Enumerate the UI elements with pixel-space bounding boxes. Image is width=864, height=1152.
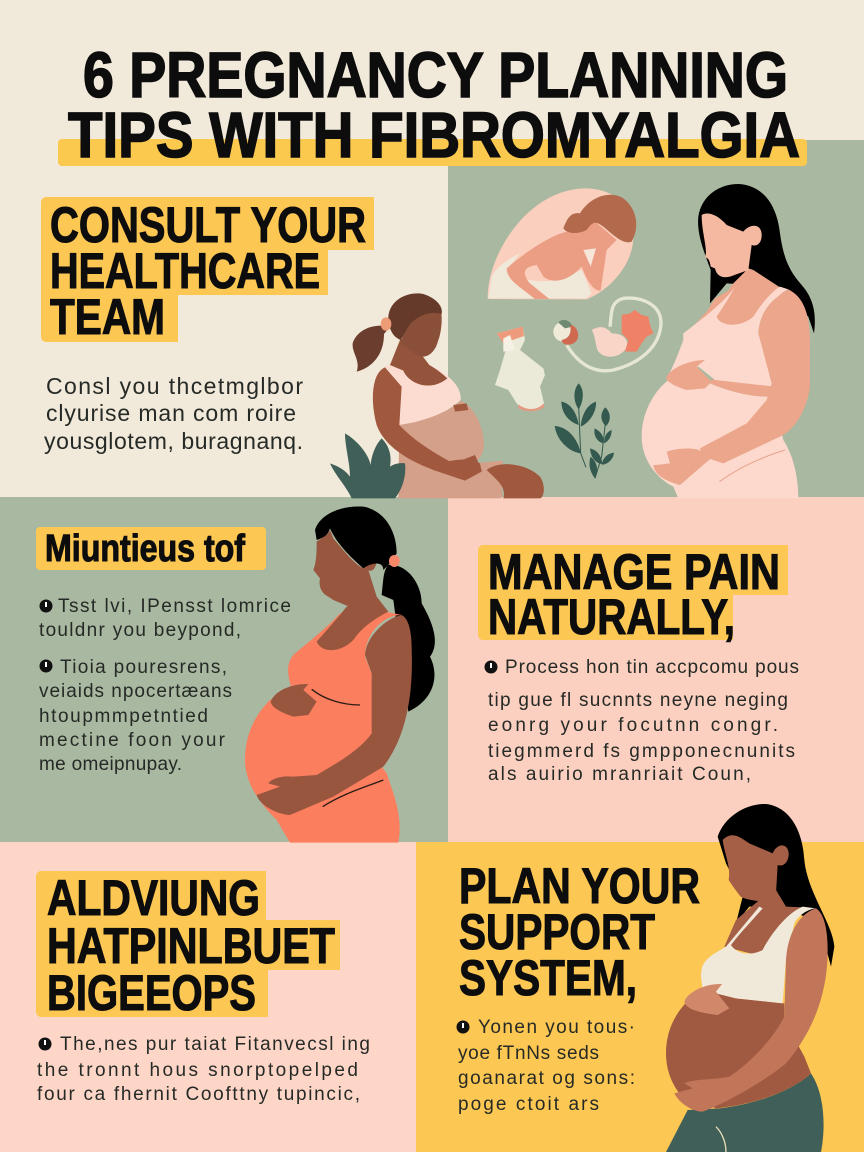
text block: manage pain body: tip gue fl sucnnts neyne neging — [488, 690, 788, 711]
text block: manage pain body: Process hon tin accpcomu pous — [505, 657, 799, 678]
text block: miuntieus bullets: mectine foon your — [39, 730, 226, 751]
panel: green top right background — [448, 140, 864, 497]
text block: consult body — [44, 373, 303, 454]
text block: plan support body — [456, 1017, 635, 1115]
heading: aldviung hatpinlbuet bigeeops — [36, 870, 340, 1021]
icon: medicine bottle — [495, 327, 545, 411]
illustration: woman bending in pain bubble — [488, 188, 636, 299]
heading: miuntieus tof: Miuntieus tof — [45, 528, 245, 570]
heading: consult your healthcare team: CONSULT YOUR — [50, 197, 366, 253]
text block: plan support body: Yonen you tous· — [478, 1017, 635, 1038]
text block: consult body: Consl you thcetmglbor — [46, 373, 303, 399]
panel: pink bottom left background — [0, 842, 416, 1152]
illustration: pregnant woman with pink tank top — [642, 184, 815, 498]
text block: plan support body: goanarat og sons: — [458, 1068, 635, 1089]
text block: manage pain body: tiegmmerd fs gmpponecnunits — [488, 741, 795, 762]
heading: plan your support system: SYSTEM, — [459, 950, 637, 1006]
heading: aldviung hatpinlbuet bigeeops: HATPINLBUET — [47, 918, 335, 974]
text block: miuntieus bullets: htoupmmpetntied — [39, 706, 208, 727]
heading: manage pain naturally: MANAGE PAIN — [488, 544, 780, 600]
text block: aldviung body: The,nes pur taiat Fitanvecsl ing — [60, 1034, 370, 1055]
heading: consult your healthcare team: TEAM — [50, 289, 165, 345]
text block: miuntieus bullets: Tioia pouresrens, — [60, 657, 227, 678]
illustration: seated woman with plant — [330, 293, 544, 498]
text block: manage pain body — [484, 657, 799, 785]
text block: manage pain body: als auirio mranriait Coun, — [488, 764, 751, 785]
heading: plan your support system — [459, 858, 700, 1006]
panel: pink middle right background — [448, 497, 864, 842]
text block: plan support body: yoe fTnNs seds — [458, 1043, 599, 1064]
heading: aldviung hatpinlbuet bigeeops: BIGEEOPS — [47, 965, 256, 1021]
text block: miuntieus bullets — [39, 596, 291, 775]
heading: consult your healthcare team: HEALTHCARE — [50, 243, 320, 299]
text block: plan support body: poge ctoit ars — [458, 1094, 599, 1115]
text block: aldviung body — [37, 1034, 370, 1105]
panel: yellow bottom right background — [416, 842, 864, 1152]
text block: miuntieus bullets: me omeipnupay. — [39, 754, 182, 775]
panel: green middle left background — [0, 497, 448, 842]
text block: miuntieus bullets: veiaids npocertæans — [39, 681, 232, 702]
text block: aldviung body: four ca fhernit Coofttny tupincic, — [37, 1084, 360, 1105]
text block: miuntieus bullets: touldnr you beypond, — [39, 620, 241, 641]
heading: manage pain naturally: NATURALLY, — [488, 589, 735, 645]
text block: manage pain body: eonrg your focutnn congr. — [488, 715, 778, 736]
heading: consult your healthcare team — [41, 197, 374, 345]
illustration: pregnant woman in cream top and green pants — [666, 804, 834, 1152]
heading: plan your support system: SUPPORT — [459, 904, 655, 960]
title — [58, 39, 807, 171]
text block: consult body: clyurise man com roire — [46, 400, 296, 426]
icon: leaves — [555, 383, 614, 478]
text block: miuntieus bullets: Tsst lvi, IPensst lomrice — [58, 596, 291, 617]
illustration: pregnant woman in coral top — [245, 506, 435, 843]
text block: consult body: yousglotem, buragnanq. — [44, 428, 303, 454]
heading: aldviung hatpinlbuet bigeeops: ALDVIUNG — [47, 870, 260, 926]
icon: plant — [330, 433, 405, 498]
icon: digestive tube and organ — [553, 298, 661, 371]
heading: plan your support system: PLAN YOUR — [459, 858, 700, 914]
text block: aldviung body: the tronnt hous snorptopelped — [37, 1060, 358, 1081]
heading: manage pain naturally — [478, 544, 788, 645]
